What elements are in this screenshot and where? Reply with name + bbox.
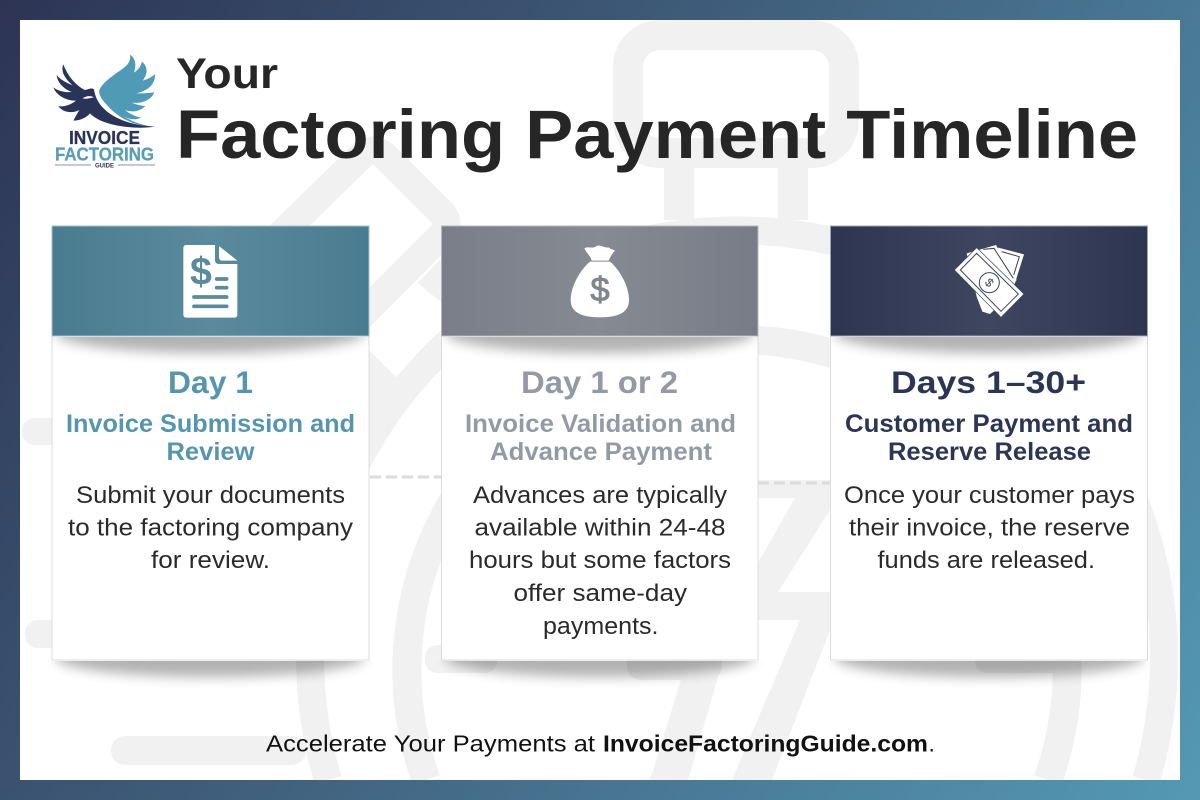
step title <box>845 410 1133 466</box>
card bottom shadow <box>442 661 758 684</box>
step description: to the factoring company <box>68 514 353 542</box>
step description: Once your customer pays <box>844 482 1135 509</box>
step description <box>68 482 353 574</box>
step title: Advance Payment <box>490 438 713 466</box>
card bottom shadow <box>52 661 368 684</box>
panel: day 1 <box>52 226 369 677</box>
icon: money bag <box>571 245 629 317</box>
title: Factoring Payment Timeline <box>176 96 1138 173</box>
card body <box>52 226 369 660</box>
icon: invoice document: $ <box>190 249 212 293</box>
card bottom shadow <box>831 661 1147 684</box>
header band <box>442 226 758 336</box>
day label: Day 1 or 2 <box>521 364 678 400</box>
logo navy wing <box>53 64 155 128</box>
icon: banknotes <box>954 245 1024 317</box>
header shadow <box>442 337 758 360</box>
card body <box>830 226 1148 660</box>
logo wordmark: FACTORING <box>55 144 154 164</box>
step title: Customer Payment and <box>845 410 1133 438</box>
card body <box>442 226 758 660</box>
step description: payments. <box>543 613 658 640</box>
logo wordmark <box>55 127 155 170</box>
logo <box>53 55 155 128</box>
header band <box>52 226 369 336</box>
title <box>176 50 1138 173</box>
dashed connector 1 to 2 <box>370 476 441 478</box>
panel: days 1-30+ <box>830 226 1148 677</box>
day label: Day 1 <box>168 364 253 400</box>
footer call to action: InvoiceFactoringGuide.com <box>603 730 928 756</box>
step title <box>465 410 736 466</box>
step description: Advances are typically <box>473 482 727 509</box>
step title <box>66 410 355 466</box>
logo head highlight <box>83 96 94 99</box>
footer call to action <box>266 730 935 756</box>
panel: day 1 or 2 <box>442 226 758 677</box>
step description: hours but some factors <box>469 547 731 574</box>
header shadow <box>831 337 1147 360</box>
step description <box>469 482 731 640</box>
step description: Submit your documents <box>76 482 345 509</box>
footer call to action: Accelerate Your Payments at <box>266 730 596 756</box>
footer call to action: . <box>928 730 935 756</box>
step description: funds are released. <box>878 547 1095 574</box>
step description <box>844 482 1135 574</box>
icon: money bag: $ <box>590 271 610 309</box>
step description: their invoice, the reserve <box>849 514 1130 542</box>
title: Your <box>176 50 278 98</box>
step title: Invoice Validation and <box>465 410 736 438</box>
step description: available within 24-48 <box>474 514 726 542</box>
dashed connector 2 to 3 <box>758 482 830 484</box>
step title: Invoice Submission and <box>66 410 355 438</box>
header shadow <box>52 337 368 360</box>
logo teal wing <box>99 55 155 127</box>
icon: invoice document <box>183 245 237 318</box>
day label: Days 1–30+ <box>891 364 1086 400</box>
step description: for review. <box>151 547 270 574</box>
step title: Reserve Release <box>888 438 1091 466</box>
header band <box>830 226 1148 336</box>
icon: banknotes: $ <box>982 275 997 290</box>
logo wordmark: INVOICE <box>69 127 140 148</box>
logo wordmark: GUIDE <box>95 164 114 170</box>
step description: offer same-day <box>514 580 687 607</box>
step title: Review <box>166 438 255 466</box>
